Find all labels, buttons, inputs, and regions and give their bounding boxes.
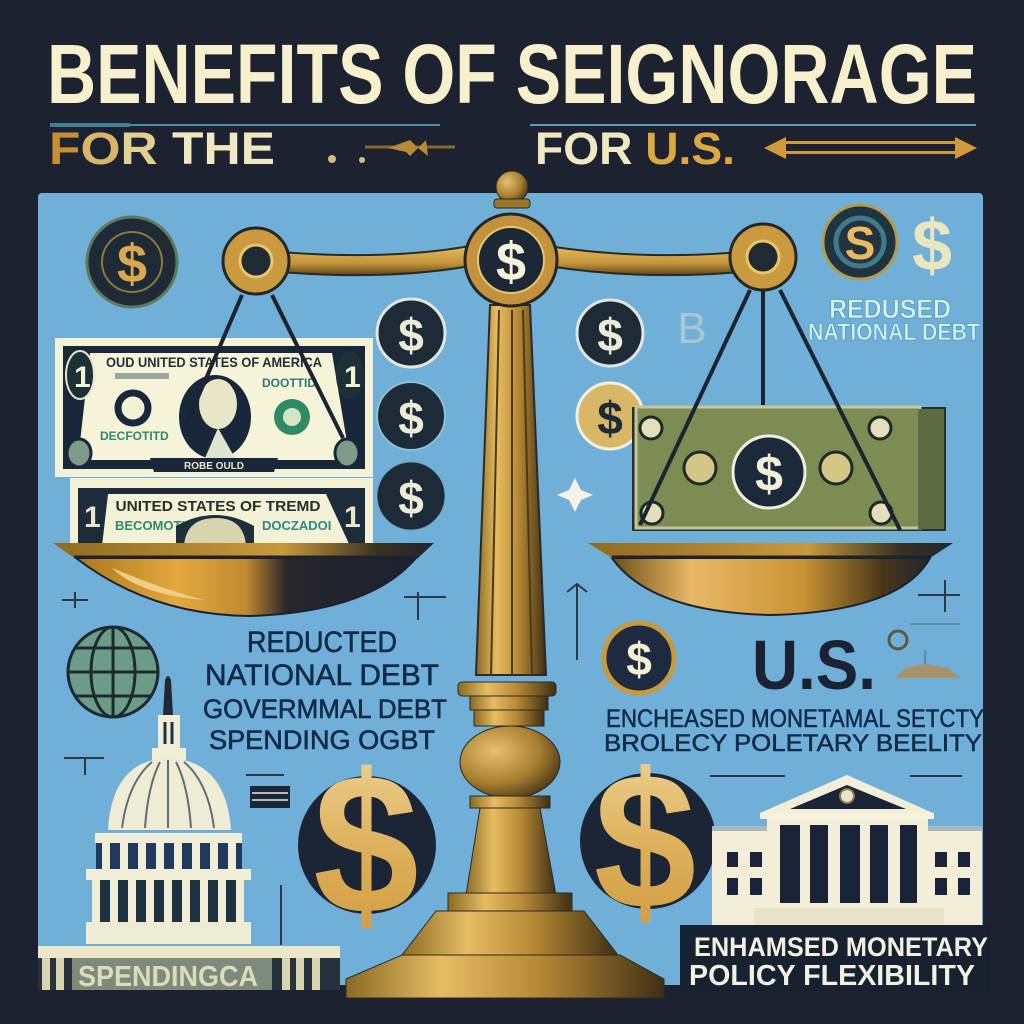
right dollar coins: $ xyxy=(597,392,623,444)
text: right benefits xyxy=(604,705,984,757)
left dollar coins: $ xyxy=(398,472,424,524)
bill: upper note: 1 xyxy=(344,361,361,394)
left bill stack xyxy=(55,338,373,546)
icon: bank building xyxy=(712,775,982,926)
right dollar coins: B xyxy=(677,304,707,353)
center medallion xyxy=(465,214,557,306)
text: left benefits: REDUCTED xyxy=(247,626,397,659)
bill: upper note xyxy=(55,338,373,477)
bill: upper note: OUD UNITED STATES OF AMERICA xyxy=(106,354,322,370)
base xyxy=(466,808,556,895)
beam xyxy=(258,246,763,275)
small arrows xyxy=(62,580,962,945)
icon: globe xyxy=(68,627,158,717)
bill: lower note: 1 xyxy=(344,501,361,534)
text: left benefits xyxy=(203,626,447,755)
text: left benefits: SPENDING OGBT xyxy=(209,725,435,755)
icon: seal and dollar top right: S xyxy=(845,217,875,269)
left dollar coins: $ xyxy=(398,309,424,361)
subtitle left: FOR THE xyxy=(49,123,275,174)
subtitle rule xyxy=(50,123,976,127)
bill: lower note: BECOMOTI xyxy=(115,518,185,533)
text box: spending cap: SPENDINGCA xyxy=(78,961,258,993)
right chains xyxy=(640,290,900,530)
balance scale xyxy=(223,171,796,998)
text: right benefits: BROLECY POLETARY BEELITY xyxy=(604,730,982,757)
icon: seal and dollar top right xyxy=(823,205,952,286)
text: right benefits: ENCHEASED MONETAMAL SETCTY xyxy=(606,705,984,733)
icon: large dollar left: $ xyxy=(313,733,419,956)
text: U.S.: U.S. xyxy=(752,626,876,704)
bill: lower note: DOCZADOI xyxy=(262,518,331,533)
icon: flag xyxy=(250,786,290,808)
left dollar coins xyxy=(377,299,445,530)
text: left benefits: NATIONAL DEBT xyxy=(205,659,439,692)
bill: lower note xyxy=(70,478,373,546)
icon: coin right middle xyxy=(604,623,674,693)
subtitle right: FOR U.S. xyxy=(535,123,735,174)
beam end right xyxy=(730,224,796,290)
center medallion: $ xyxy=(496,232,526,292)
icon: capitol xyxy=(86,676,251,944)
text box: enhanced monetary policy flexibility xyxy=(680,925,990,992)
left pan xyxy=(53,543,434,616)
icon: sparkle xyxy=(557,478,593,512)
text: reduced national debt top right: REDUSED xyxy=(829,294,951,324)
right money bundle xyxy=(632,407,946,531)
bill: lower note: 1 xyxy=(84,501,101,534)
left dollar coins: $ xyxy=(398,392,424,444)
bill: upper note: DOOTTID xyxy=(262,376,316,390)
finial xyxy=(494,171,530,208)
icon: large dollar right: $ xyxy=(594,734,696,950)
right pan xyxy=(588,543,953,615)
text box: spending cap xyxy=(38,946,340,993)
text: left benefits: GOVERMMAL DEBT xyxy=(203,694,447,724)
panel: blue background xyxy=(38,193,983,985)
column xyxy=(476,305,546,675)
icon: faded capitol xyxy=(889,624,960,678)
icon: seal and dollar top right: $ xyxy=(912,206,952,286)
bill: upper note: 1 xyxy=(74,361,91,394)
right dollar coins xyxy=(577,300,707,449)
subtitle arrow right xyxy=(764,137,977,159)
bill: upper note: ROBE OULD xyxy=(184,461,244,472)
bill: lower note: UNITED STATES OF TREMD xyxy=(116,498,321,515)
beam end left xyxy=(223,228,289,294)
bill: upper note: DECFOTITD xyxy=(100,429,169,443)
icon: dollar badge top left: $ xyxy=(117,234,147,294)
right money bundle: $ xyxy=(755,446,783,502)
left chains xyxy=(186,295,343,438)
knob xyxy=(460,726,560,798)
text box: enhanced monetary policy flexibility: POLICY FLEXIBILITY xyxy=(689,960,975,992)
text box: enhanced monetary policy flexibility: ENHAMSED MONETARY xyxy=(694,932,988,962)
text: reduced national debt top right xyxy=(808,294,980,346)
icon: dollar badge top left xyxy=(87,217,177,307)
text: reduced national debt top right: NATIONAL DEBT xyxy=(808,319,980,346)
right dollar coins: $ xyxy=(597,309,623,361)
icon: coin right middle: $ xyxy=(626,633,652,685)
subtitle arrow left xyxy=(328,140,455,163)
collars xyxy=(458,682,556,696)
